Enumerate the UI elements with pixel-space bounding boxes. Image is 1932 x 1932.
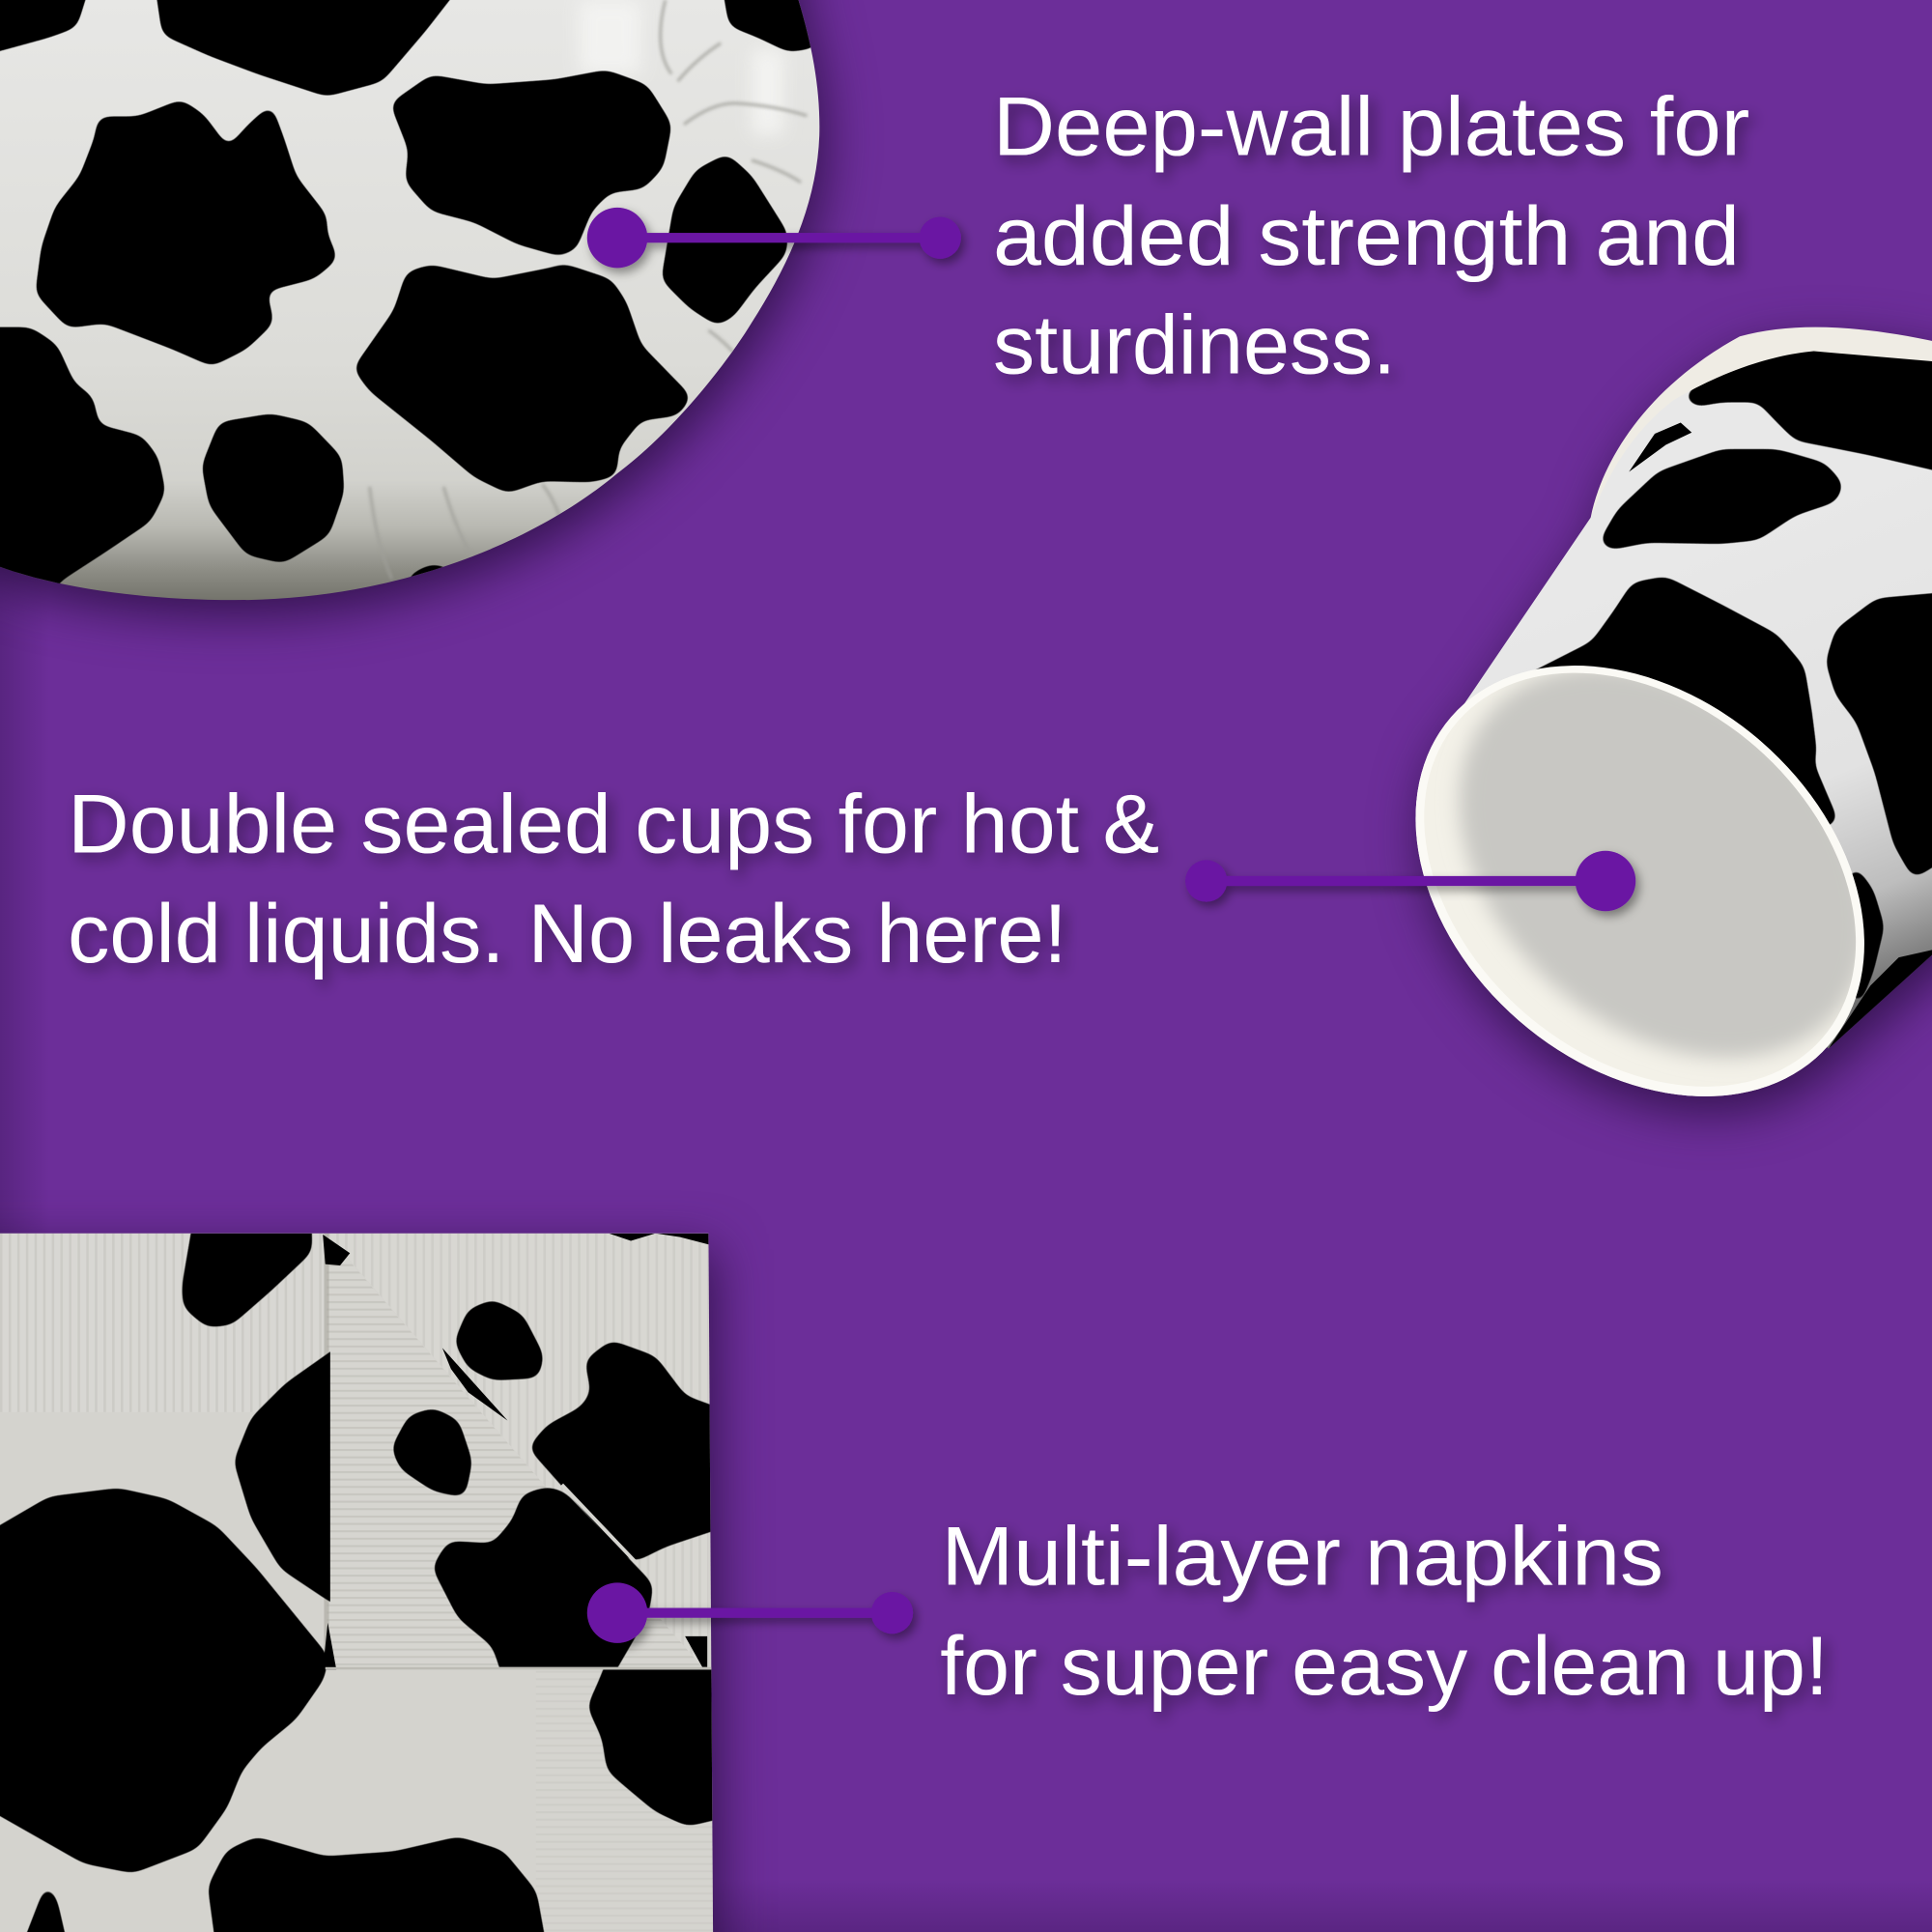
text: plates: added strength and <box>993 189 1740 283</box>
connector: plate <box>587 208 961 268</box>
text: plates <box>993 80 1749 391</box>
connector: napkin <box>587 1582 913 1643</box>
text: plates: Deep-wall plates for <box>993 80 1749 174</box>
text: napkins <box>940 1509 1829 1713</box>
text: napkins: Multi-layer napkins <box>941 1509 1663 1603</box>
text: cups <box>68 778 1159 980</box>
panel: napkin <box>0 1208 739 1932</box>
text: napkins: for super easy clean up! <box>940 1619 1829 1713</box>
cup rim <box>1591 327 1932 518</box>
cup base <box>1330 578 1932 1184</box>
text: plates: sturdiness. <box>993 298 1396 391</box>
text: cups: Double sealed cups for hot & <box>68 778 1159 871</box>
panel: paper plate <box>0 0 819 616</box>
panel: paper cup <box>1393 314 1932 1142</box>
text: cups: cold liquids. No leaks here! <box>68 887 1067 980</box>
connector: cup <box>1185 851 1635 911</box>
